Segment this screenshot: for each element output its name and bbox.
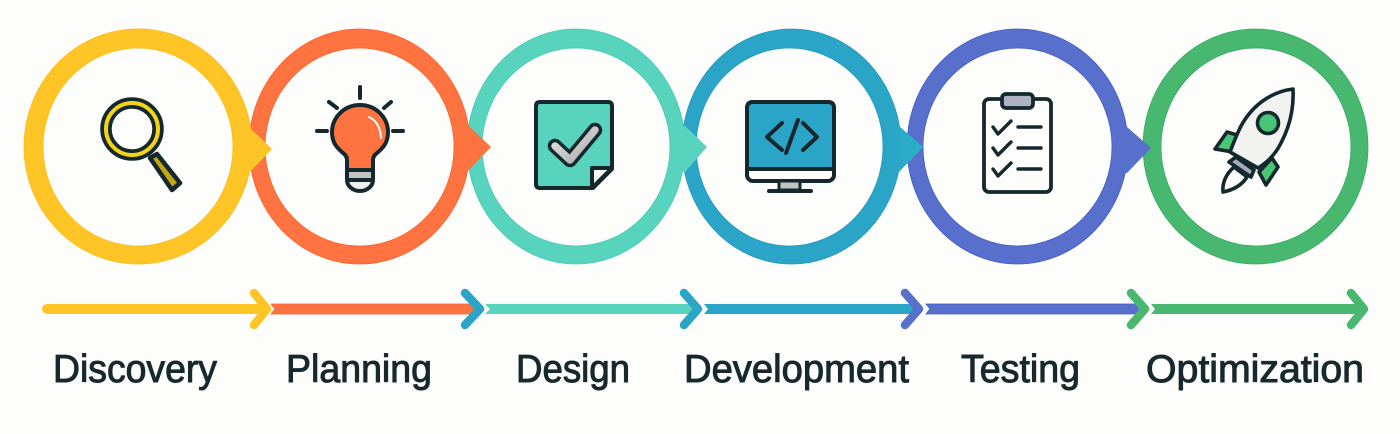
ring and pointer: Design bbox=[467, 29, 707, 264]
arrow: Planning bbox=[271, 293, 480, 325]
label: Planning: Planning bbox=[286, 348, 432, 391]
arrow: Design bbox=[485, 293, 698, 325]
arrow: Testing bbox=[926, 293, 1145, 325]
arrow: Development bbox=[704, 293, 919, 325]
icon: monitor with code bbox=[747, 102, 834, 191]
icon: light bulb bbox=[317, 87, 403, 191]
ring: Optimization bbox=[1143, 29, 1368, 264]
label: Optimization: Optimization bbox=[1146, 348, 1364, 391]
label: Testing: Testing bbox=[961, 348, 1080, 391]
icon: magnifying glass bbox=[106, 103, 180, 190]
label: Design: Design bbox=[516, 348, 630, 391]
arrow: Discovery bbox=[47, 293, 267, 325]
label: Discovery: Discovery bbox=[53, 348, 218, 391]
arrow: Optimization bbox=[1151, 293, 1364, 325]
ring and pointer: Testing bbox=[907, 29, 1151, 264]
ring and pointer: Planning bbox=[249, 29, 491, 264]
icon: rocket bbox=[1215, 89, 1293, 192]
ring and pointer: Discovery bbox=[24, 29, 272, 264]
ring and pointer: Development bbox=[682, 29, 923, 264]
icon: clipboard checklist bbox=[984, 94, 1051, 192]
label: Development: Development bbox=[684, 348, 909, 391]
icon: document with check mark bbox=[536, 102, 612, 188]
